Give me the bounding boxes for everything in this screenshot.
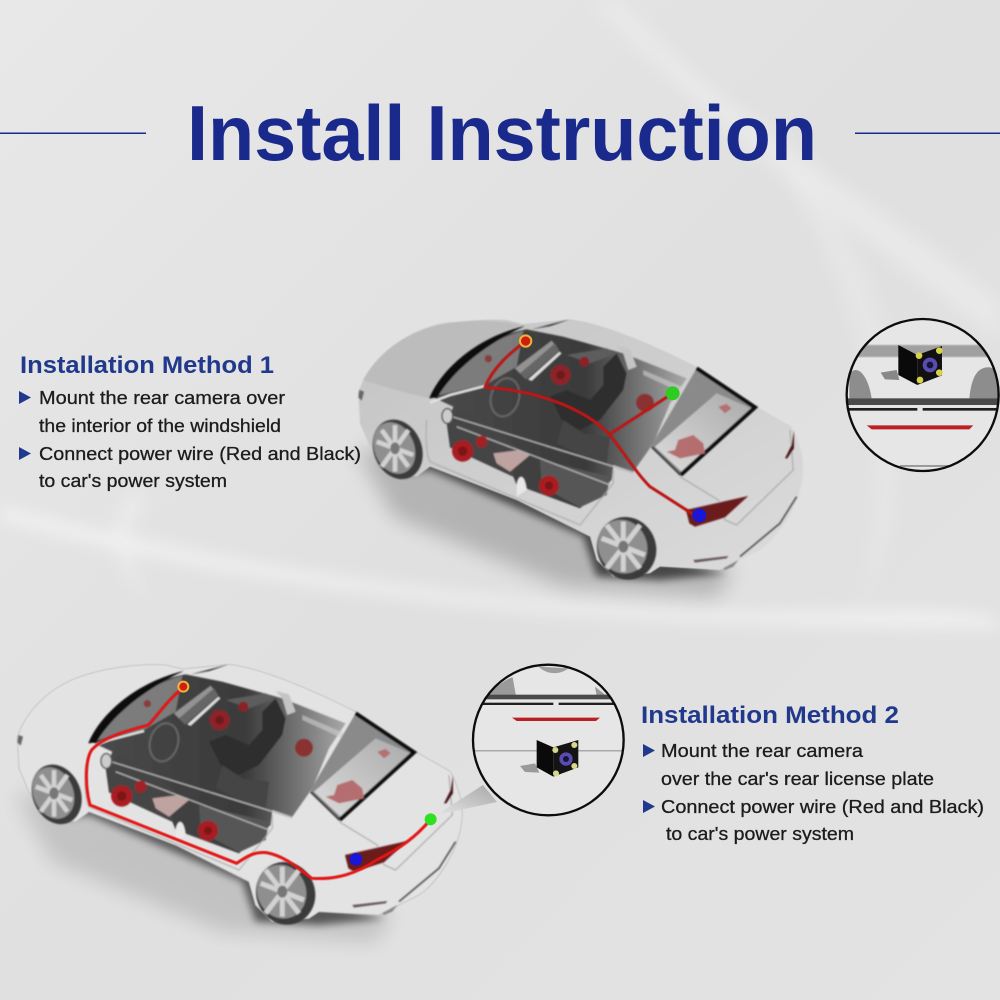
text line: Mount the rear camera [661, 740, 864, 761]
text line: over the car's rear license plate [661, 768, 934, 789]
text line: the interior of the windshield [39, 415, 281, 436]
title rule right [855, 132, 1000, 134]
text line: Connect power wire (Red and Black) [661, 796, 984, 817]
bullet 1 [19, 391, 31, 404]
car 1 parts [358, 319, 797, 589]
dot: camera mount red [520, 335, 531, 347]
car 1 soft shadow [357, 450, 733, 597]
panel: installation method 1 text [19, 352, 361, 491]
text line: to car's power system [666, 823, 854, 844]
wedge pointer [436, 785, 497, 815]
car 1 body [358, 319, 803, 577]
text line: Connect power wire (Red and Black) [39, 443, 361, 464]
text line: to car's power system [39, 470, 227, 491]
inset circle: camera on license plate [473, 665, 625, 815]
title rule left [0, 132, 146, 134]
dot: green [666, 386, 680, 400]
dot: blue [692, 508, 706, 522]
bullet 1 [643, 744, 655, 757]
icon: rear camera [520, 740, 578, 777]
car 2 body [17, 664, 462, 922]
car 2 parts [17, 664, 456, 934]
heading method 2: Installation Method 2 [641, 702, 899, 729]
car 2 wire overlay [86, 682, 437, 879]
wire: red door route [86, 688, 430, 879]
bullet 2 [643, 800, 655, 813]
car 2 with wiring [16, 664, 462, 942]
dot: blue [350, 853, 362, 866]
heading method 1: Installation Method 1 [20, 352, 274, 379]
panel: installation method 2 text [641, 702, 984, 844]
wire: red power route [485, 341, 692, 513]
car 1 dark shadow [403, 457, 727, 580]
title: Install Instruction [187, 89, 817, 177]
car 1 bonnet [363, 321, 520, 398]
car 1 with wiring [357, 319, 803, 597]
icon: rear camera [881, 345, 943, 385]
dot: green [425, 813, 437, 825]
bullet 2 [19, 447, 31, 460]
text line: Mount the rear camera over [39, 387, 285, 408]
car 2 soft shadow [16, 795, 392, 942]
dot: camera mount red [178, 682, 188, 692]
car 2 dark shadow [62, 802, 386, 925]
inset circle: camera in windshield [840, 319, 1000, 471]
